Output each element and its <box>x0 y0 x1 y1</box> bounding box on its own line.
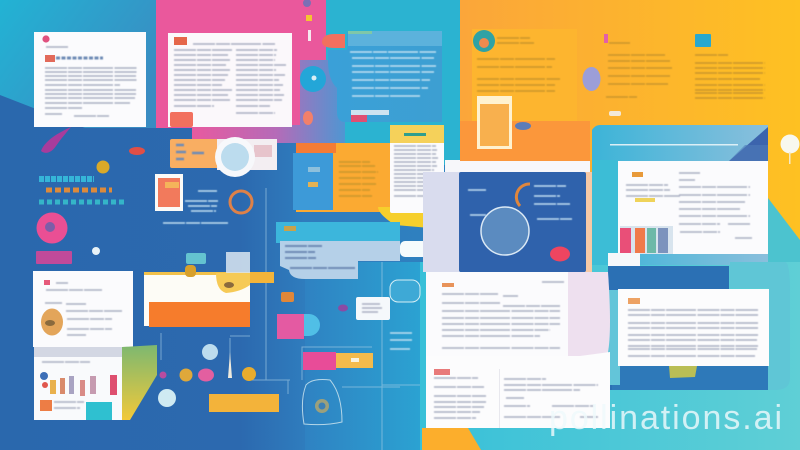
text block: left teal heading lines <box>39 179 127 202</box>
text block: small white caption <box>163 191 228 223</box>
bar: pink and yellow label <box>303 352 373 370</box>
panel: blue gradient with triangle <box>592 125 768 265</box>
timeline dots <box>158 344 256 407</box>
icons: small dots beside pink panel <box>300 0 347 125</box>
icon: pink donut <box>36 212 68 244</box>
note: yellow-topped list <box>378 125 444 228</box>
panel: dark blue diagram <box>459 172 586 272</box>
card: pink section document <box>168 33 292 127</box>
label: yellow box <box>209 394 279 412</box>
bubble: white note <box>356 297 390 320</box>
icon: purple bean <box>338 304 348 312</box>
swoosh: magenta accent <box>41 127 71 153</box>
panel: pale band with header <box>276 222 400 279</box>
card: lower white document <box>426 352 610 428</box>
thumbnail: salmon poster <box>155 174 183 211</box>
label: pink bar <box>36 251 72 264</box>
icon: orange ring <box>230 191 252 213</box>
watermark: pollinations.ai <box>549 399 782 437</box>
panel: blue text panel <box>328 31 442 122</box>
tab: olive tag <box>669 366 697 378</box>
card: long paragraph document <box>618 289 769 366</box>
text block: orange cards copy <box>477 38 765 98</box>
right column pills <box>390 241 430 349</box>
panel: orange and white banner <box>144 252 274 327</box>
outline box with circle <box>302 380 342 425</box>
card: bottom left note <box>33 271 133 347</box>
icon: white dot <box>92 247 100 255</box>
panel: lilac backing <box>423 160 592 272</box>
card: peach label with magnifier <box>170 137 277 177</box>
connector lines <box>161 188 420 450</box>
panel: deep blue block <box>608 253 790 390</box>
card: top left document <box>34 32 146 127</box>
card: chart document <box>618 161 768 254</box>
icon: red marker <box>129 147 145 155</box>
icon: yellow circle <box>96 160 110 174</box>
icon: orange stamp <box>281 292 294 302</box>
panel: orange text group <box>293 143 390 212</box>
icon: white ball <box>780 134 800 164</box>
card: large white document <box>426 272 610 358</box>
chart card: bars and green shape <box>34 345 157 420</box>
panel: orange yellow header cards <box>460 29 711 161</box>
panel: pink backdrop <box>156 0 345 143</box>
shape: pink square and blue half circle <box>277 314 320 339</box>
orange wedge <box>422 428 481 450</box>
